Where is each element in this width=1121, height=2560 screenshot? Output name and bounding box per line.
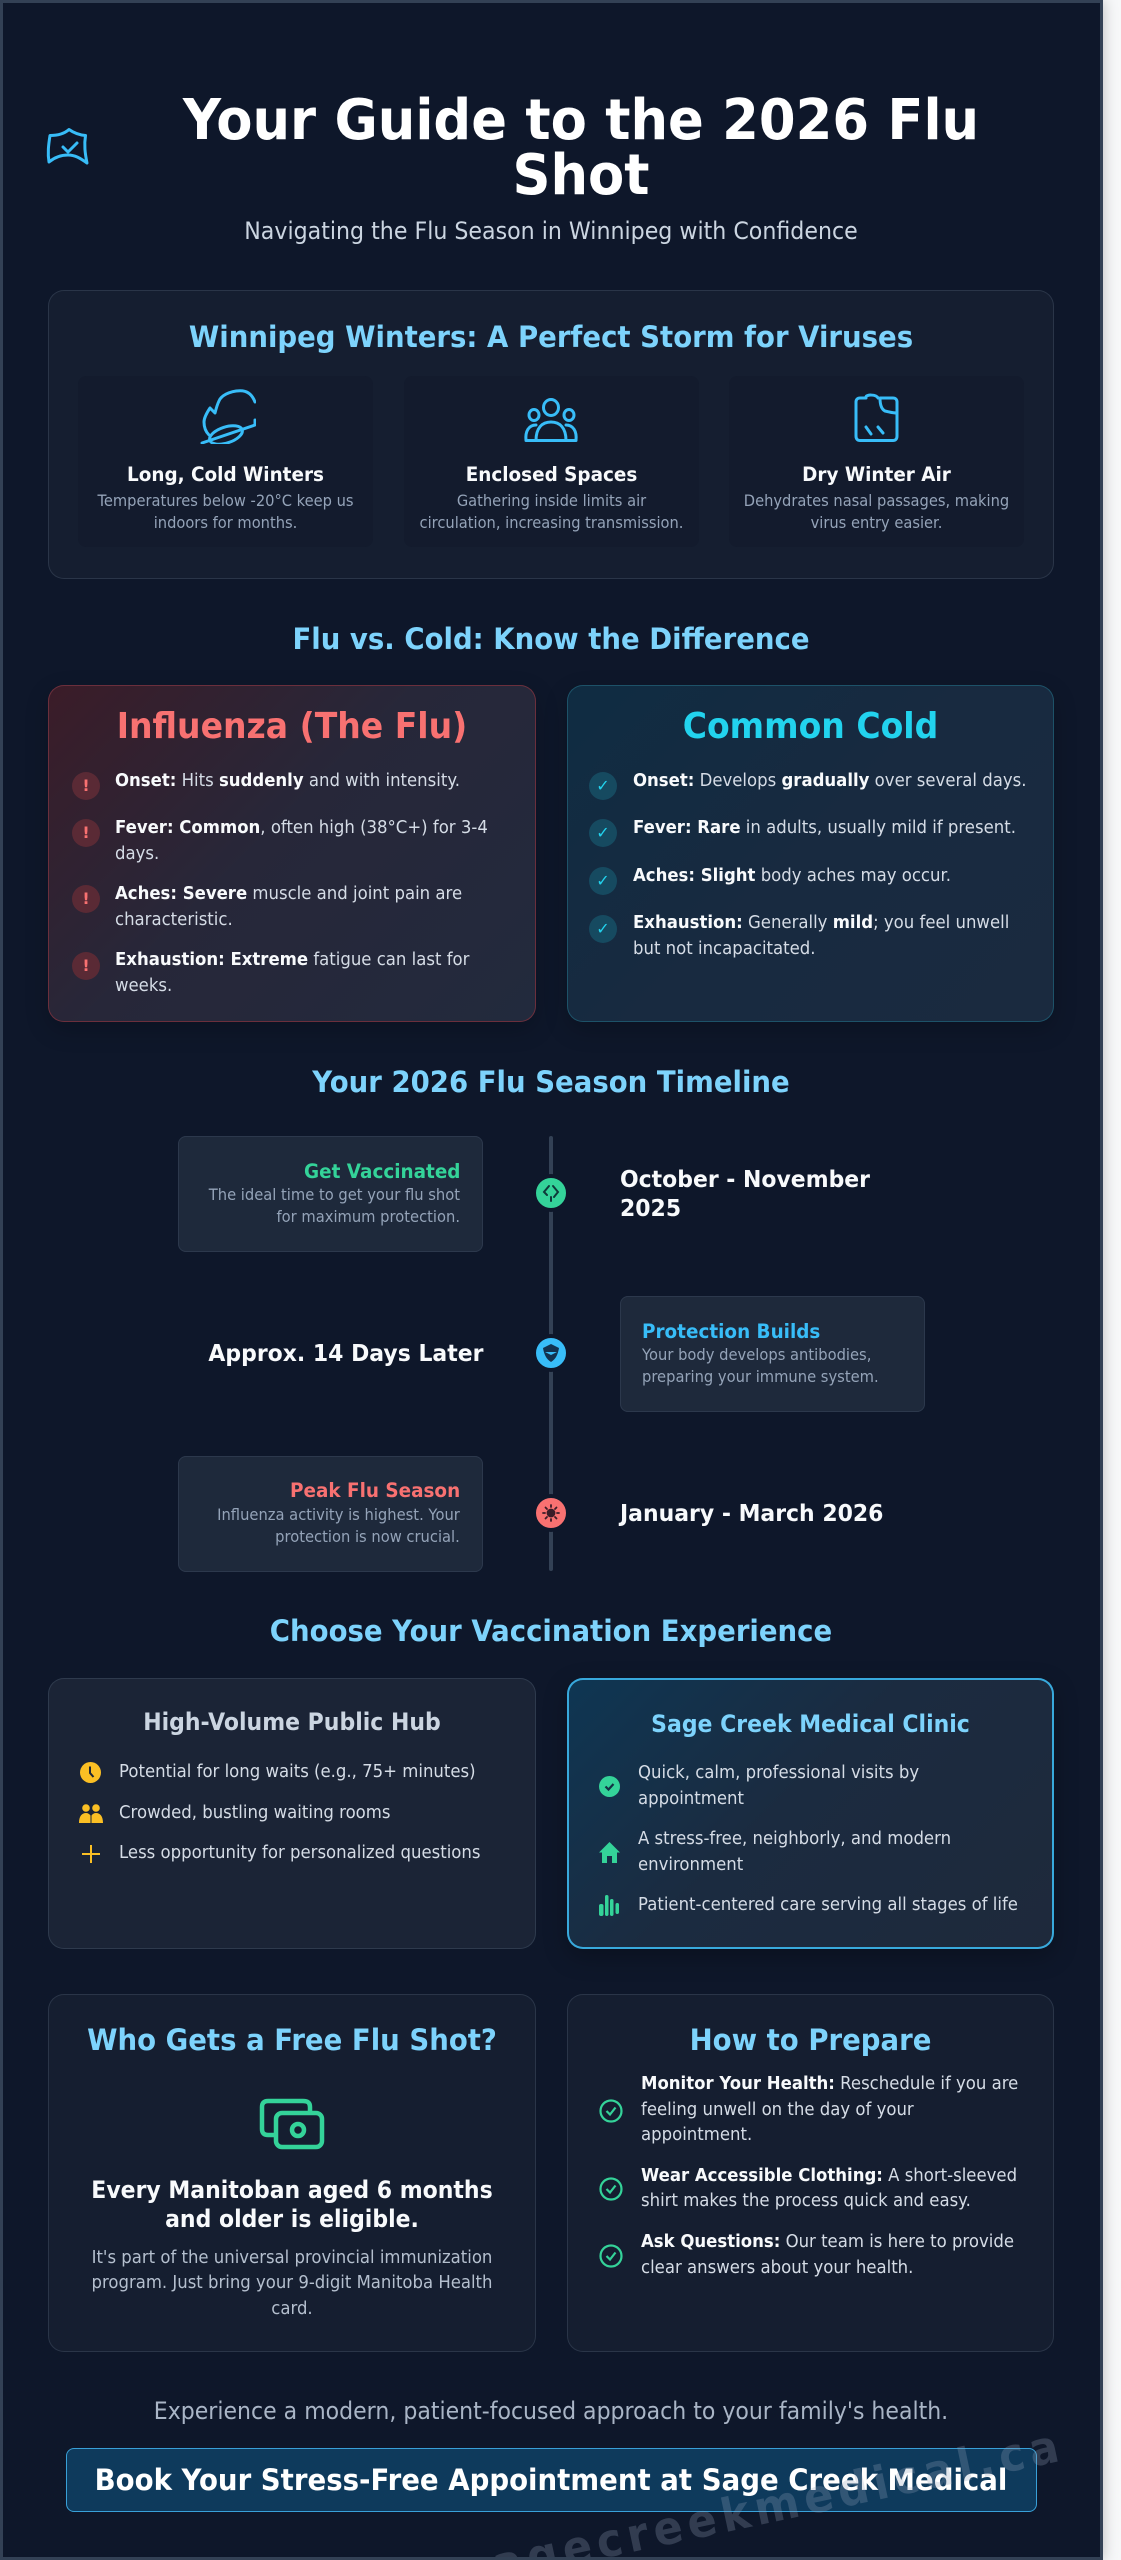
text: exhaustion: [114, 950, 470, 996]
icon: check questions: [599, 2244, 623, 2268]
text: clothing: shirt makes the process quick and easy.: [640, 2191, 970, 2211]
text: stress free: A stress-free, neighborly, and modern: [638, 1829, 951, 1849]
icon: check exhaustion: [589, 915, 617, 943]
timeline: [178, 1136, 925, 1572]
date label: october november: 2025: [620, 1194, 681, 1222]
text: fever: Fever: Common, often high (38°C+) for 3-4: [114, 818, 487, 838]
icon: check aches: [589, 867, 617, 895]
heading: Winnipeg winters: Winnipeg Winters: A Perfect Storm for Viruses: [189, 320, 913, 354]
icon: check monitor: [599, 2099, 623, 2123]
icon: alert exhaustion: !: [82, 956, 90, 975]
icon: check aches: ✓: [596, 871, 610, 890]
icon: bars: [599, 1895, 619, 1916]
eligibility description: card.: [271, 2299, 313, 2319]
date label: october november: October - November: [620, 1164, 870, 1192]
text: fever: Fever: Rare in adults, usually mild if present.: [633, 818, 1016, 838]
text: less opportunity: Less opportunity for personalized questions: [119, 1843, 480, 1863]
heading: vaccination experience: Choose Your Vaccination Experience: [270, 1614, 832, 1648]
text: stress free: [638, 1829, 951, 1875]
heading: sage creek: Sage Creek Medical Clinic: [651, 1710, 970, 1738]
text: onset: Onset: Hits suddenly and with intensity.: [114, 771, 459, 791]
icon: check clothing: [599, 2177, 623, 2201]
timeline axis: [549, 1136, 553, 1571]
text: monitor health: [640, 2074, 1018, 2145]
eligibility statement: [91, 2176, 493, 2232]
panel: common cold: [567, 685, 1054, 1022]
icon: vaccine: [542, 1185, 560, 1202]
card: long cold winters: [78, 376, 373, 547]
icon: check onset: ✓: [596, 776, 610, 795]
panel: Winnipeg winters: [48, 290, 1054, 579]
date label: approx 14 days: Approx. 14 Days Later: [208, 1338, 483, 1366]
eligibility statement: and older is eligible.: [165, 2204, 419, 2232]
event title: Peak Flu Season: [290, 1479, 460, 1502]
icon: alert fever: [72, 819, 100, 847]
event description: Influenza activity is highest. Your: [217, 1505, 460, 1524]
event description: [217, 1505, 460, 1546]
icon: shield with checkmark: [46, 128, 88, 165]
text: monitor health: appointment.: [640, 2125, 752, 2145]
text: aches: Aches: Severe muscle and joint pain are: [114, 884, 462, 904]
description: Dehydrates nasal passages, making: [744, 491, 1009, 510]
panel: influenza: [48, 685, 536, 1022]
text: exhaustion: [633, 913, 1009, 959]
panel: free flu shot: [48, 1994, 536, 2352]
icon: check fever: [589, 819, 617, 847]
card: dry winter air: [729, 376, 1024, 547]
button label: Book Your Stress-Free Appointment at Sage Creek Medical: [95, 2462, 1007, 2496]
text: questions: clear answers about your health.: [640, 2258, 913, 2278]
title: [182, 88, 979, 208]
icon: virus: [542, 1504, 560, 1522]
title: Shot: [512, 143, 650, 208]
card: enclosed spaces: [404, 376, 699, 547]
description: Temperatures below -20°C keep us: [97, 491, 354, 510]
text: exhaustion: Exhaustion: Generally mild; you feel unwell: [633, 913, 1009, 933]
icon: cold weather: [200, 389, 256, 444]
text: questions: Ask Questions: Our team is here to provide: [640, 2232, 1014, 2252]
icon: alert exhaustion: [72, 952, 100, 980]
text: clothing: [640, 2166, 1017, 2211]
node: peak: [532, 1494, 570, 1532]
heading: flu vs cold: Flu vs. Cold: Know the Difference: [292, 622, 810, 656]
description: [97, 491, 354, 532]
panel: public hub: [48, 1678, 536, 1949]
event title: Protection Builds: [642, 1320, 820, 1343]
icon: check onset: [589, 772, 617, 800]
icon: alert aches: !: [82, 889, 90, 908]
heading: how to prepare: How to Prepare: [690, 2022, 931, 2056]
text: fever: days.: [114, 844, 159, 864]
icon: alert aches: [72, 885, 100, 913]
text: fever: [114, 818, 487, 864]
eligibility description: [92, 2248, 492, 2319]
heading: common cold: Common Cold: [683, 706, 938, 747]
event description: Your body develops antibodies,: [642, 1345, 871, 1364]
panel: sage creek: [567, 1678, 1054, 1949]
icon: alert onset: [72, 772, 100, 800]
node: vaccination: [532, 1174, 570, 1212]
text: stress free: environment: [638, 1855, 743, 1875]
event description: [642, 1345, 879, 1386]
date label: october november: [620, 1164, 870, 1222]
description: indoors for months.: [154, 513, 297, 532]
label: Long, Cold Winters: [127, 462, 324, 486]
text: aches: [114, 884, 462, 930]
icon: check exhaustion: ✓: [596, 919, 610, 938]
icon: alert onset: !: [82, 776, 90, 795]
title: Your Guide to the 2026 Flu: [183, 88, 979, 152]
icon: house: [599, 1842, 620, 1863]
icon: dry air: [854, 394, 898, 442]
text: patient centered: Patient-centered care serving all stages of life: [638, 1895, 1017, 1915]
event description: The ideal time to get your flu shot: [209, 1185, 460, 1204]
panel: how to prepare: [567, 1994, 1054, 2352]
text: aches: Aches: Slight body aches may occur.: [633, 866, 951, 886]
icon: check fever: ✓: [596, 823, 610, 842]
icon: money: [260, 2098, 324, 2150]
date label: january march: January - March 2026: [620, 1498, 883, 1526]
text: crowded: Crowded, bustling waiting rooms: [119, 1803, 390, 1823]
icon: clock: [80, 1762, 101, 1783]
text: monitor health: Monitor Your Health: Reschedule if you are: [640, 2074, 1018, 2094]
event title: Get Vaccinated: [304, 1160, 460, 1183]
call to action button: [66, 2448, 1037, 2512]
text: questions: [640, 2230, 1014, 2281]
eligibility description: It's part of the universal provincial immunization: [92, 2248, 492, 2268]
event description: preparing your immune system.: [642, 1367, 879, 1386]
description: [744, 491, 1009, 532]
text: quick calm: appointment: [638, 1789, 743, 1809]
icon: group of people: [524, 398, 578, 442]
text: clothing: Wear Accessible Clothing: A short-sleeved: [640, 2166, 1017, 2186]
text: monitor health: feeling unwell on the day of your: [640, 2100, 913, 2120]
description: virus entry easier.: [811, 513, 942, 532]
heading: timeline: Your 2026 Flu Season Timeline: [312, 1064, 790, 1098]
heading: public hub: High-Volume Public Hub: [143, 1708, 441, 1736]
text: exhaustion: Exhaustion: Extreme fatigue can last for: [114, 950, 469, 970]
node: protection: [532, 1334, 570, 1372]
text: aches: characteristic.: [114, 910, 232, 930]
text: quick calm: [638, 1763, 919, 1809]
heading: influenza: Influenza (The Flu): [117, 706, 467, 747]
event description: protection is now crucial.: [275, 1527, 460, 1546]
icon: protective shield: [543, 1344, 559, 1362]
event description: [208, 1185, 460, 1226]
event description: for maximum protection.: [276, 1207, 460, 1226]
text: onset: Onset: Develops gradually over several days.: [633, 771, 1026, 791]
eligibility description: program. Just bring your 9-digit Manitoba Health: [92, 2273, 492, 2293]
label: Enclosed Spaces: [466, 462, 637, 486]
icon: people: [79, 1804, 103, 1823]
text: exhaustion: weeks.: [114, 976, 172, 996]
event box: peak flu season: [178, 1456, 483, 1572]
text: quick calm: Quick, calm, professional visits by: [638, 1763, 919, 1783]
label: Dry Winter Air: [802, 462, 951, 486]
event box: get vaccinated: [178, 1136, 483, 1252]
text: long waits: Potential for long waits (e.g., 75+ minutes): [119, 1762, 475, 1782]
description: circulation, increasing transmission.: [420, 513, 683, 532]
event box: protection builds: [620, 1296, 925, 1412]
description: Gathering inside limits air: [457, 491, 646, 510]
text: exhaustion: but not incapacitated.: [633, 939, 815, 959]
icon: check circle: [599, 1776, 620, 1797]
closing statement: Experience a modern, patient-focused approach to your family's health.: [154, 2397, 948, 2425]
subtitle: Navigating the Flu Season in Winnipeg with Confidence: [244, 217, 858, 245]
icon: plus: [82, 1845, 100, 1863]
heading: free flu shot: Who Gets a Free Flu Shot?: [87, 2022, 497, 2056]
description: [420, 491, 683, 532]
eligibility statement: Every Manitoban aged 6 months: [91, 2176, 493, 2204]
icon: alert fever: !: [82, 823, 90, 842]
